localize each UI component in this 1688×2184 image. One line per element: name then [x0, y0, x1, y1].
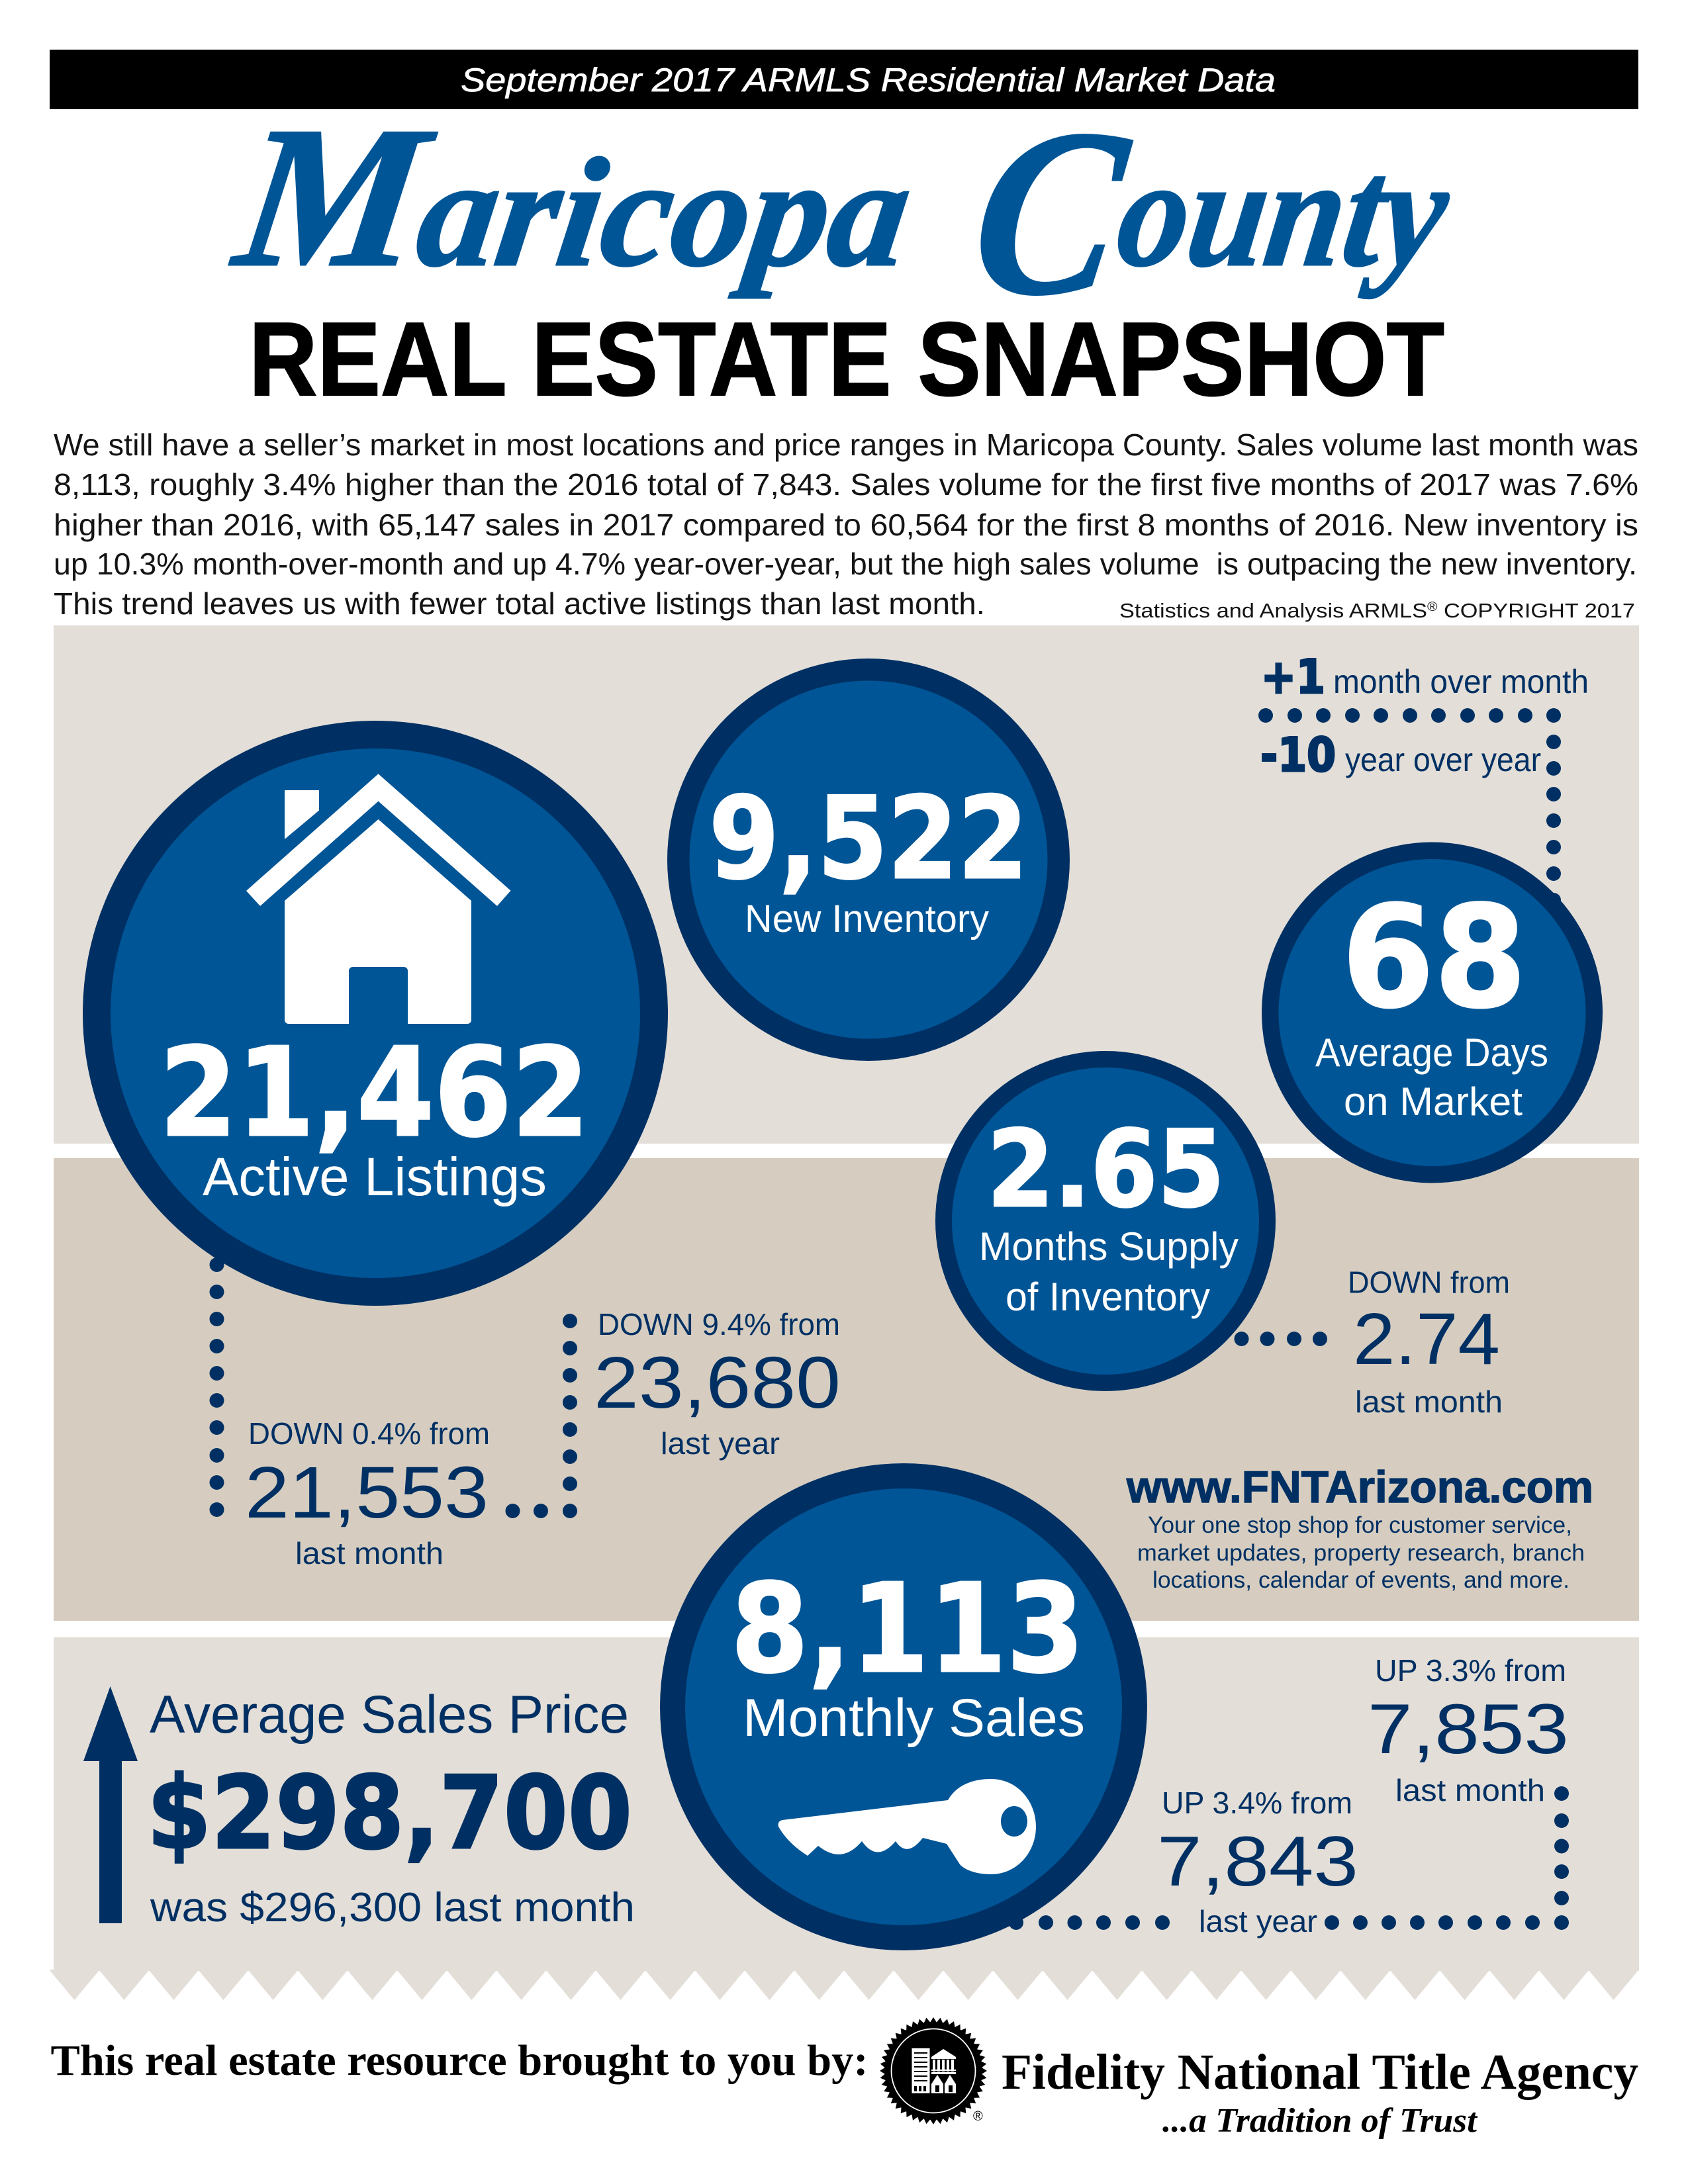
- panel: top band: [54, 625, 1639, 1144]
- title: Maricopa County: Maricopa: [222, 85, 927, 309]
- circle: active listings: 21,462: [160, 1021, 589, 1164]
- website block: market updates, property research, branch: [1137, 1540, 1585, 1566]
- dotted connector: months supply: [1234, 1332, 1327, 1346]
- title: Maricopa County: ounty: [1108, 127, 1459, 299]
- stat: listings last month: 21,553: [245, 1452, 489, 1533]
- circle: new inventory: New Inventory: [745, 897, 989, 940]
- stat: months supply last month: last month: [1355, 1385, 1503, 1419]
- stat: days month over month: month over month: [1333, 663, 1589, 700]
- title: Maricopa County: C: [959, 81, 1143, 345]
- website block: www.FNTArizona.com: [1126, 1462, 1593, 1512]
- stat: listings last month: last month: [295, 1536, 444, 1570]
- average sales price block: [147, 1685, 635, 1931]
- intro paragraph: up 10.3% month-over-month and up 4.7% year-over-year, but the high sales volume is outpacing the new inventory.: [54, 547, 1637, 581]
- circle: monthly sales: [660, 1463, 1147, 1950]
- circle: new inventory: [667, 659, 1070, 1061]
- icon: house: [246, 774, 511, 1024]
- header bar: September 2017 ARMLS Residential Market Data: [461, 62, 1276, 99]
- circle: monthly sales: Monthly Sales: [743, 1688, 1085, 1748]
- dotted connector: days on market: [1258, 708, 1561, 907]
- stat: months supply last month: DOWN from: [1348, 1265, 1510, 1300]
- circle: months supply of inventory: 2.65: [987, 1107, 1225, 1231]
- stat: sales last month: 7,853: [1368, 1689, 1569, 1768]
- icon: company seal: ®: [973, 2109, 983, 2124]
- average sales price block: was $296,300 last month: [150, 1885, 635, 1931]
- circle: average days on market: [1262, 842, 1603, 1183]
- icon: company seal: [857, 1995, 1009, 2147]
- dotted connector: active listings: [209, 1257, 577, 1518]
- circle: average days on market: Average Days: [1315, 1030, 1548, 1075]
- stat: listings last year: last year: [661, 1426, 780, 1461]
- stat: sales last year: 7,843: [1157, 1821, 1358, 1901]
- stat: listings last year: 23,680: [594, 1342, 841, 1424]
- company name: Fidelity National Title Agency: [1002, 2044, 1638, 2100]
- header bar: [50, 50, 1638, 109]
- website block: locations, calendar of events, and more.: [1152, 1567, 1570, 1593]
- icon: up arrow: [83, 1686, 138, 1923]
- stat: sales last year: last year: [1199, 1904, 1317, 1938]
- stat: sales last year: [1157, 1786, 1358, 1938]
- copyright note: COPYRIGHT 2017: [1437, 599, 1635, 622]
- stat: sales last month: UP 3.3% from: [1375, 1653, 1566, 1688]
- circle: new inventory: 9,522: [709, 773, 1028, 905]
- intro paragraph: This trend leaves us with fewer total active listings than last month.: [54, 586, 985, 621]
- circle: average days on market: 68: [1342, 876, 1526, 1039]
- panel: middle band: [54, 1158, 1639, 1621]
- circle: months supply of inventory: of Inventory: [1006, 1275, 1210, 1319]
- circle: average days on market: on Market: [1344, 1079, 1523, 1124]
- stat: days year over year: -10: [1260, 728, 1336, 782]
- intro paragraph: We still have a seller’s market in most locations and price ranges in Maricopa County. Sales volume last month was: [54, 428, 1638, 462]
- circle: months supply of inventory: [935, 1051, 1276, 1391]
- footer tagline: This real estate resource brought to you by:: [50, 2036, 868, 2085]
- website block: [1126, 1462, 1593, 1593]
- stat: listings last year: DOWN 9.4% from: [598, 1307, 840, 1342]
- title: Maricopa County: [222, 81, 1466, 345]
- stat: sales last month: last month: [1395, 1773, 1545, 1807]
- stat: sales last year: UP 3.4% from: [1162, 1786, 1352, 1820]
- stat: days year over year: [1260, 728, 1541, 782]
- circle: active listings: Active Listings: [203, 1147, 547, 1207]
- circle: months supply of inventory: Months Supply: [979, 1224, 1239, 1269]
- zigzag edge: [50, 1970, 1638, 2000]
- stat: listings last month: DOWN 0.4% from: [248, 1416, 490, 1451]
- intro paragraph: higher than 2016, with 65,147 sales in 2017 compared to 60,564 for the first 8 months of 2016. New inventory is: [54, 508, 1638, 542]
- intro paragraph: [54, 428, 1638, 621]
- average sales price block: $298,700: [147, 1754, 632, 1872]
- copyright note: ®: [1427, 600, 1437, 614]
- stat: months supply last month: [1348, 1265, 1510, 1419]
- stat: sales last month: [1368, 1653, 1569, 1807]
- stat: days month over month: +1: [1261, 650, 1325, 704]
- stat: listings last month: [245, 1416, 490, 1570]
- stat: listings last year: [594, 1307, 841, 1461]
- stat: months supply last month: 2.74: [1353, 1298, 1500, 1380]
- subtitle: REAL ESTATE SNAPSHOT: [249, 301, 1444, 418]
- website block: Your one stop shop for customer service,: [1148, 1512, 1572, 1538]
- company tagline: ...a Tradition of Trust: [1162, 2102, 1478, 2140]
- circle: monthly sales: 8,113: [731, 1557, 1084, 1700]
- average sales price block: Average Sales Price: [150, 1685, 629, 1745]
- stat: days year over year: year over year: [1345, 741, 1541, 778]
- icon: key: [778, 1779, 1036, 1874]
- circle: active listings: [83, 721, 668, 1306]
- panel: bottom band: [54, 1637, 1639, 1971]
- stat: days month over month: [1261, 650, 1589, 704]
- intro paragraph: 8,113, roughly 3.4% higher than the 2016 total of 7,843. Sales volume for the first five months of 2017 was 7.6%: [54, 467, 1638, 502]
- copyright note: Statistics and Analysis ARMLS: [1119, 599, 1397, 622]
- dotted connector: monthly sales: [1009, 1786, 1569, 1930]
